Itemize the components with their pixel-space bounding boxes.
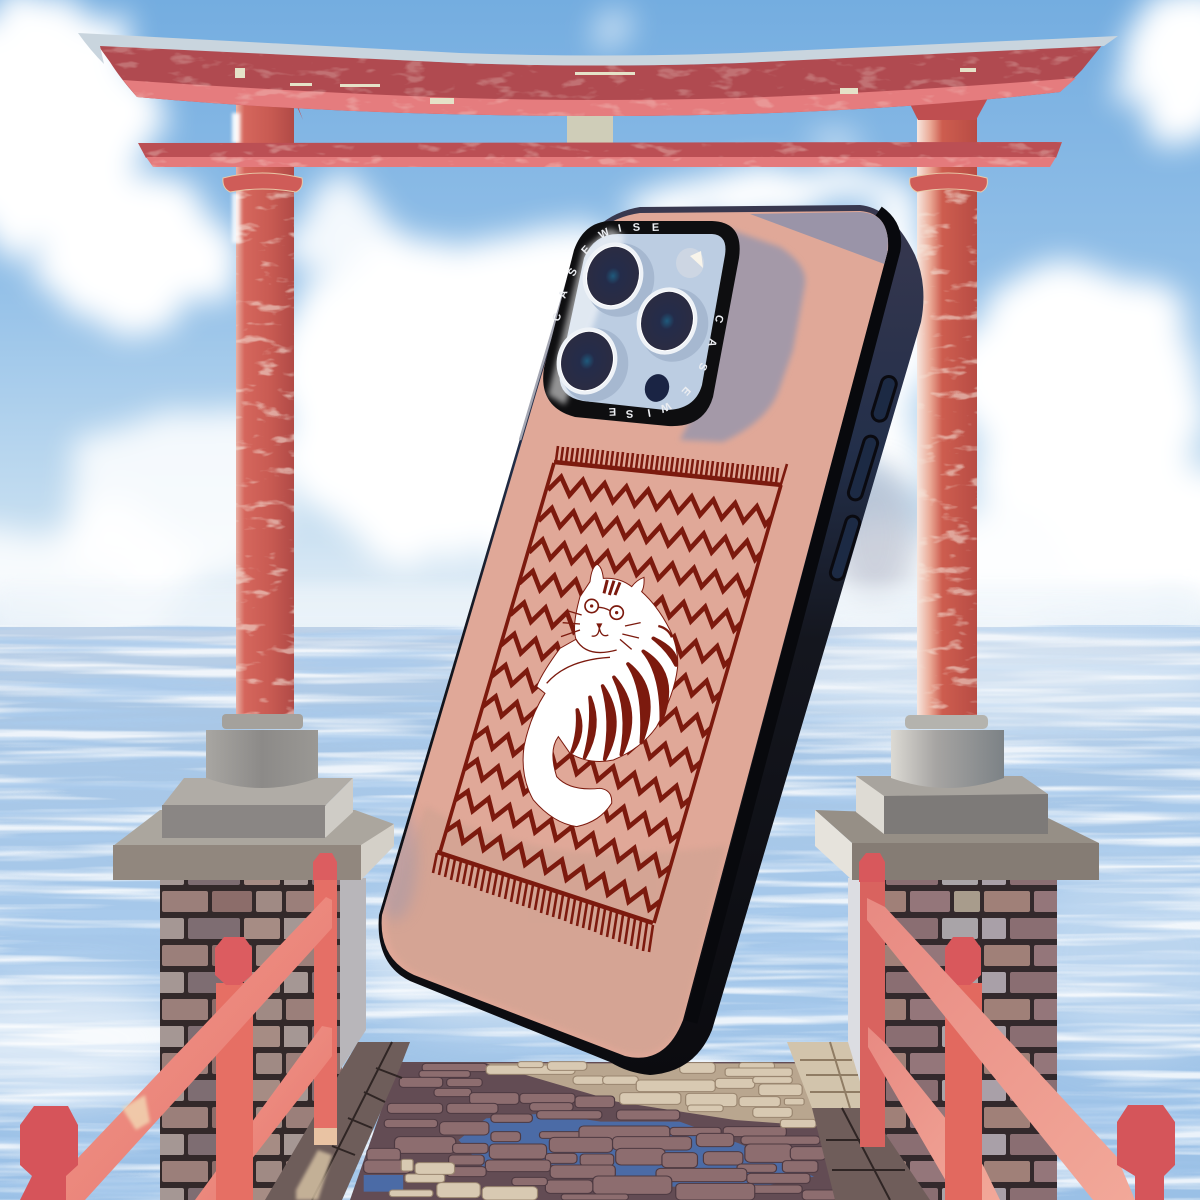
left upper rail xyxy=(55,897,332,1200)
torii right column xyxy=(905,85,990,720)
water xyxy=(0,625,1200,1200)
left brick pier xyxy=(160,878,366,1200)
right stone drum xyxy=(891,715,1004,788)
right brick pier xyxy=(848,878,1057,1200)
sunlit stones xyxy=(389,1062,816,1200)
left railing xyxy=(20,853,337,1200)
left stone drum xyxy=(206,714,318,788)
torii lower beam xyxy=(138,142,1062,167)
phone case side xyxy=(379,205,923,1075)
left rear post xyxy=(313,853,337,1145)
cat xyxy=(523,564,678,827)
right upper rail xyxy=(867,898,1135,1200)
lens bottom xyxy=(548,319,638,411)
torii top beam xyxy=(78,33,1118,116)
shadowed stones xyxy=(364,1063,842,1200)
right curb xyxy=(787,1042,930,1200)
camera plate xyxy=(559,234,725,410)
cat stripes xyxy=(572,638,676,759)
camera island xyxy=(543,221,740,426)
right stone slab xyxy=(815,810,1099,880)
puddles xyxy=(364,1113,814,1192)
cat face xyxy=(547,599,641,683)
right front post xyxy=(1117,1105,1175,1200)
rug illustration xyxy=(433,446,787,952)
black inner rim xyxy=(691,212,895,1022)
phone side buttons xyxy=(829,375,898,582)
flash xyxy=(676,248,704,278)
floor scene, mapped from close-up coordinates xyxy=(364,1062,842,1200)
left glare xyxy=(548,228,625,405)
sky background xyxy=(0,0,1200,630)
rug zigzag rows xyxy=(442,475,779,913)
left stone step xyxy=(162,778,353,838)
lens right xyxy=(628,279,718,371)
left curb xyxy=(265,1042,410,1200)
brand text right: CASEWISE xyxy=(609,313,726,419)
horizon haze xyxy=(0,585,1200,627)
left stone pedestal xyxy=(113,714,394,1200)
pale left rim highlight xyxy=(520,272,570,440)
right lower rail xyxy=(868,1027,1000,1200)
lidar sensor xyxy=(641,371,673,405)
stone bridge floor xyxy=(265,1042,930,1200)
lens top xyxy=(574,234,664,326)
phone back xyxy=(382,211,888,1058)
torii centre block xyxy=(567,100,613,144)
torii left column xyxy=(217,85,303,720)
left lower rail xyxy=(195,1026,332,1200)
left stone slab xyxy=(113,810,394,880)
right middle post xyxy=(945,937,982,1200)
rug bottom fringe xyxy=(433,853,653,952)
torii gate xyxy=(78,33,1118,720)
lit floor base xyxy=(486,1063,826,1127)
phone xyxy=(373,205,923,1075)
right rear post xyxy=(859,853,885,1147)
cat silhouette xyxy=(523,564,678,827)
grey cloud shadow behind phone xyxy=(835,465,915,605)
right railing xyxy=(859,853,1175,1200)
clouds xyxy=(0,0,1200,630)
reflection shading xyxy=(373,212,888,1054)
left front post xyxy=(20,1106,78,1200)
right stone pedestal xyxy=(815,715,1099,1200)
camera bezel xyxy=(543,221,740,426)
left middle post xyxy=(215,937,253,1200)
rug top fringe xyxy=(556,446,787,484)
brand text left: CASEWISE xyxy=(550,222,659,323)
right stone step xyxy=(856,776,1048,834)
rug bands and borders xyxy=(437,462,782,923)
